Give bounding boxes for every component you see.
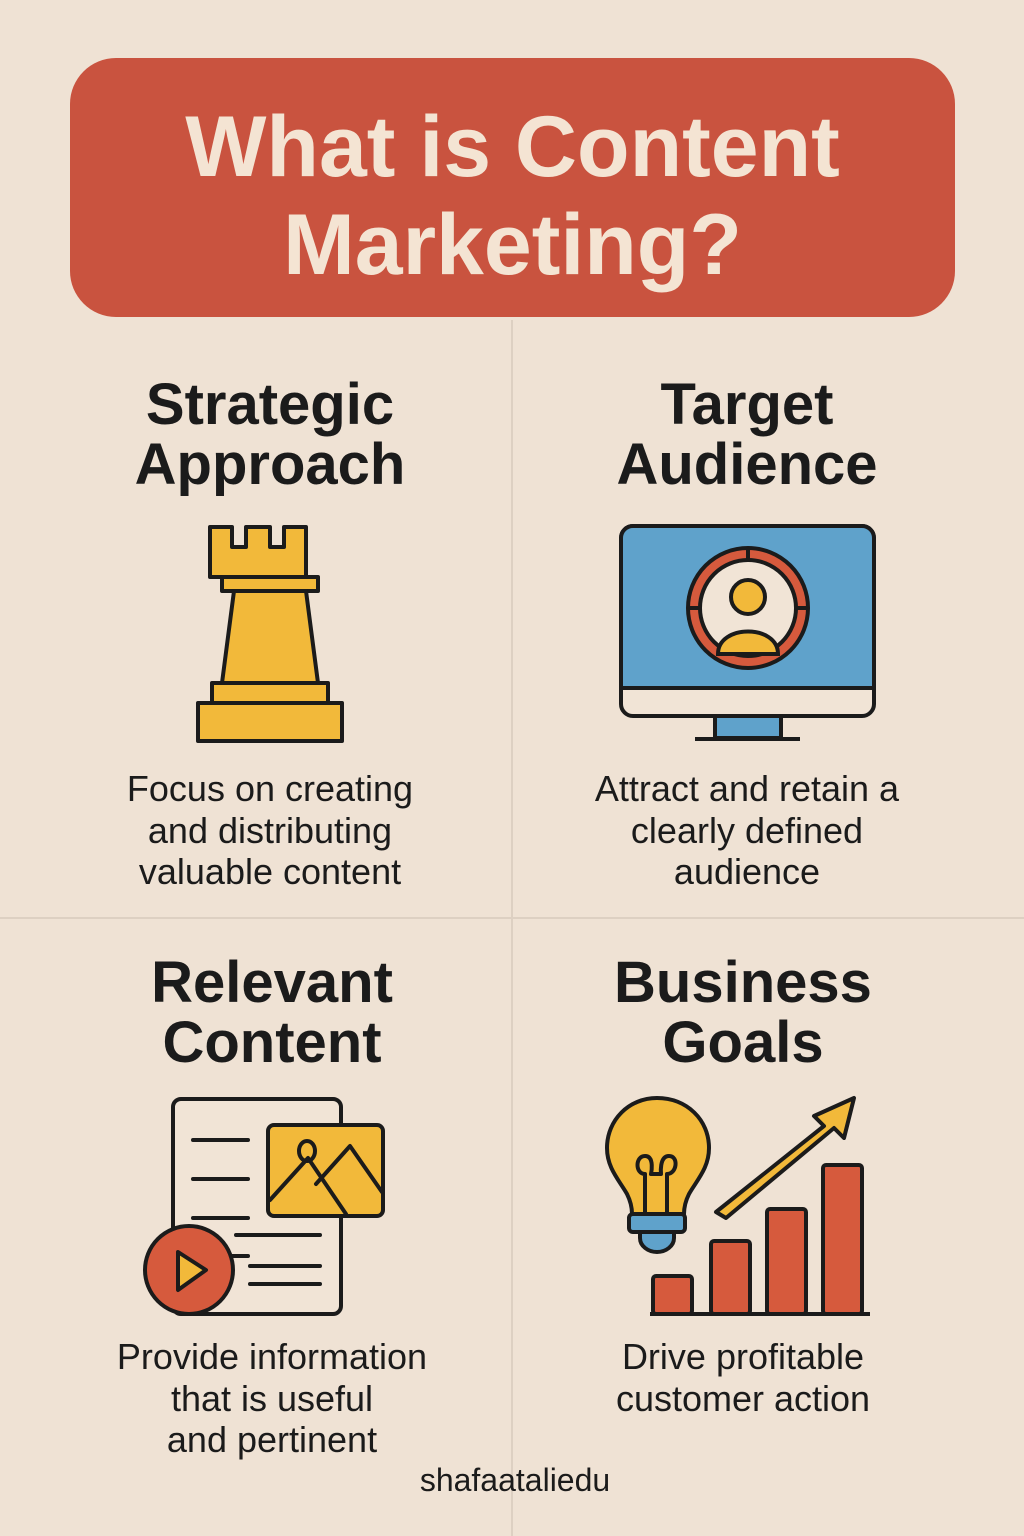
heading: target audience: Audience (616, 432, 878, 497)
text: business: Drive profitable (622, 1336, 864, 1377)
title banner (70, 58, 955, 317)
icon: content doc (143, 1097, 385, 1316)
text: relevant (117, 1336, 427, 1460)
heading: relevant content (151, 950, 393, 1075)
text: target (595, 768, 900, 892)
heading: relevant content: Relevant (151, 950, 393, 1015)
text: strategic: and distributing (148, 810, 392, 850)
text: target: audience (674, 851, 820, 892)
text: business (616, 1336, 870, 1418)
text: relevant: that is useful (171, 1378, 373, 1418)
icon: monitor target (619, 524, 876, 741)
title banner: What is Content (185, 99, 840, 195)
icon: bulb and growth chart (605, 1096, 870, 1316)
text: target: Attract and retain a (595, 768, 899, 809)
title banner: Marketing? (283, 197, 742, 293)
heading: business goals: Business (614, 950, 872, 1015)
icon: chess rook (196, 525, 344, 743)
text: business: customer action (616, 1378, 870, 1418)
heading: strategic approach: Strategic (146, 372, 394, 437)
text: relevant: and pertinent (167, 1419, 377, 1460)
text: relevant: Provide information (117, 1336, 427, 1377)
heading: strategic approach (135, 372, 405, 497)
text: strategic (127, 768, 413, 892)
watermark: shafaataliedu (420, 1462, 610, 1498)
heading: relevant content: Content (162, 1010, 382, 1075)
text: strategic: Focus on creating (127, 768, 413, 809)
heading: business goals: Goals (662, 1010, 824, 1075)
heading: strategic approach: Approach (135, 432, 405, 497)
text: strategic: valuable content (139, 851, 401, 892)
text: target: clearly defined (631, 810, 863, 850)
heading: target audience: Target (661, 372, 833, 437)
heading: target audience (616, 372, 878, 497)
heading: business goals (614, 950, 872, 1075)
